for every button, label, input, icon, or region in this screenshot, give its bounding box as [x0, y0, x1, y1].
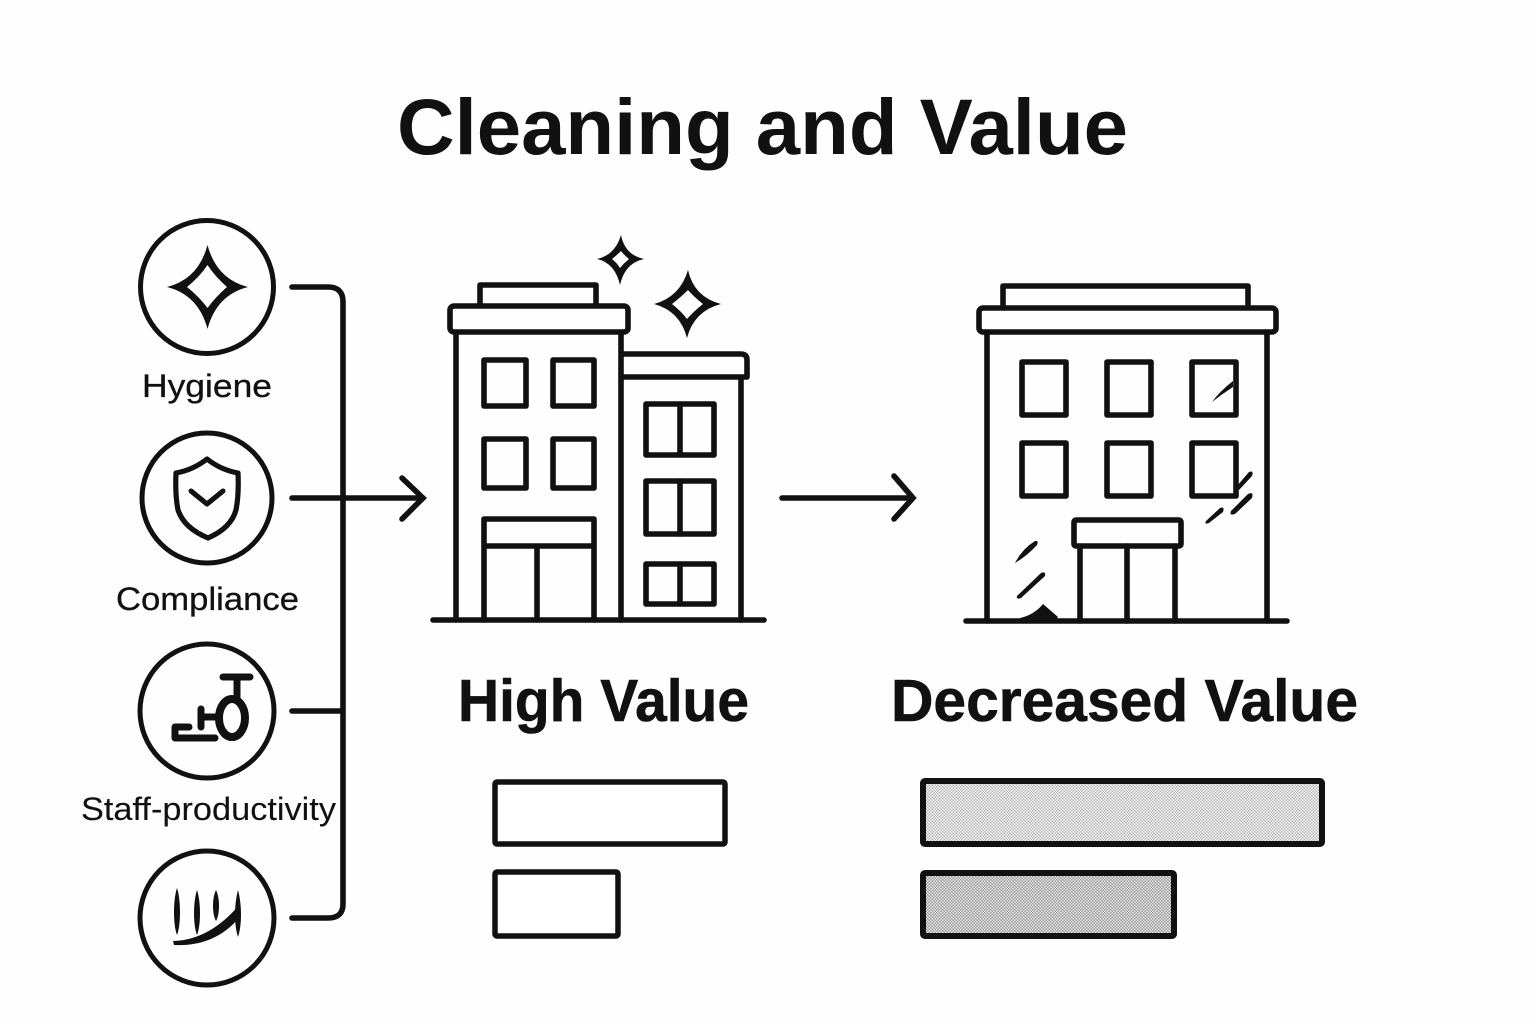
bar: high value upper	[495, 782, 725, 844]
heading: High Value: High Value	[458, 668, 749, 734]
panel: clean building	[433, 235, 764, 936]
arrow: high value to decreased value	[782, 476, 913, 519]
panel: value factors	[81, 220, 336, 985]
label: Compliance: Compliance	[116, 581, 299, 617]
heading: Decreased Value: Decreased Value	[891, 668, 1358, 734]
bar: decreased value lower	[923, 873, 1174, 936]
label: Staff-productivity: Staff-productivity	[81, 791, 336, 827]
icon: worn building	[966, 286, 1287, 621]
icon: hygiene sparkle	[140, 220, 274, 354]
label: Hygiene: Hygiene	[142, 368, 272, 404]
panel: neglected building	[891, 286, 1358, 936]
icon: compliance shield	[142, 433, 272, 563]
bar: decreased value upper	[923, 781, 1322, 844]
icon: cracks and damage marks	[1015, 381, 1253, 620]
icon: two-part clean building	[433, 285, 764, 620]
icon: staff productivity machine	[140, 644, 274, 778]
title: Cleaning and Value	[397, 82, 1128, 171]
icon: sparkle large	[654, 270, 721, 338]
icon: growth chart marks	[140, 851, 274, 985]
icon: sparkle small	[597, 235, 644, 285]
arrow: factors to high value	[292, 478, 423, 519]
bar: high value lower	[495, 872, 618, 936]
bracket connector	[292, 287, 343, 918]
